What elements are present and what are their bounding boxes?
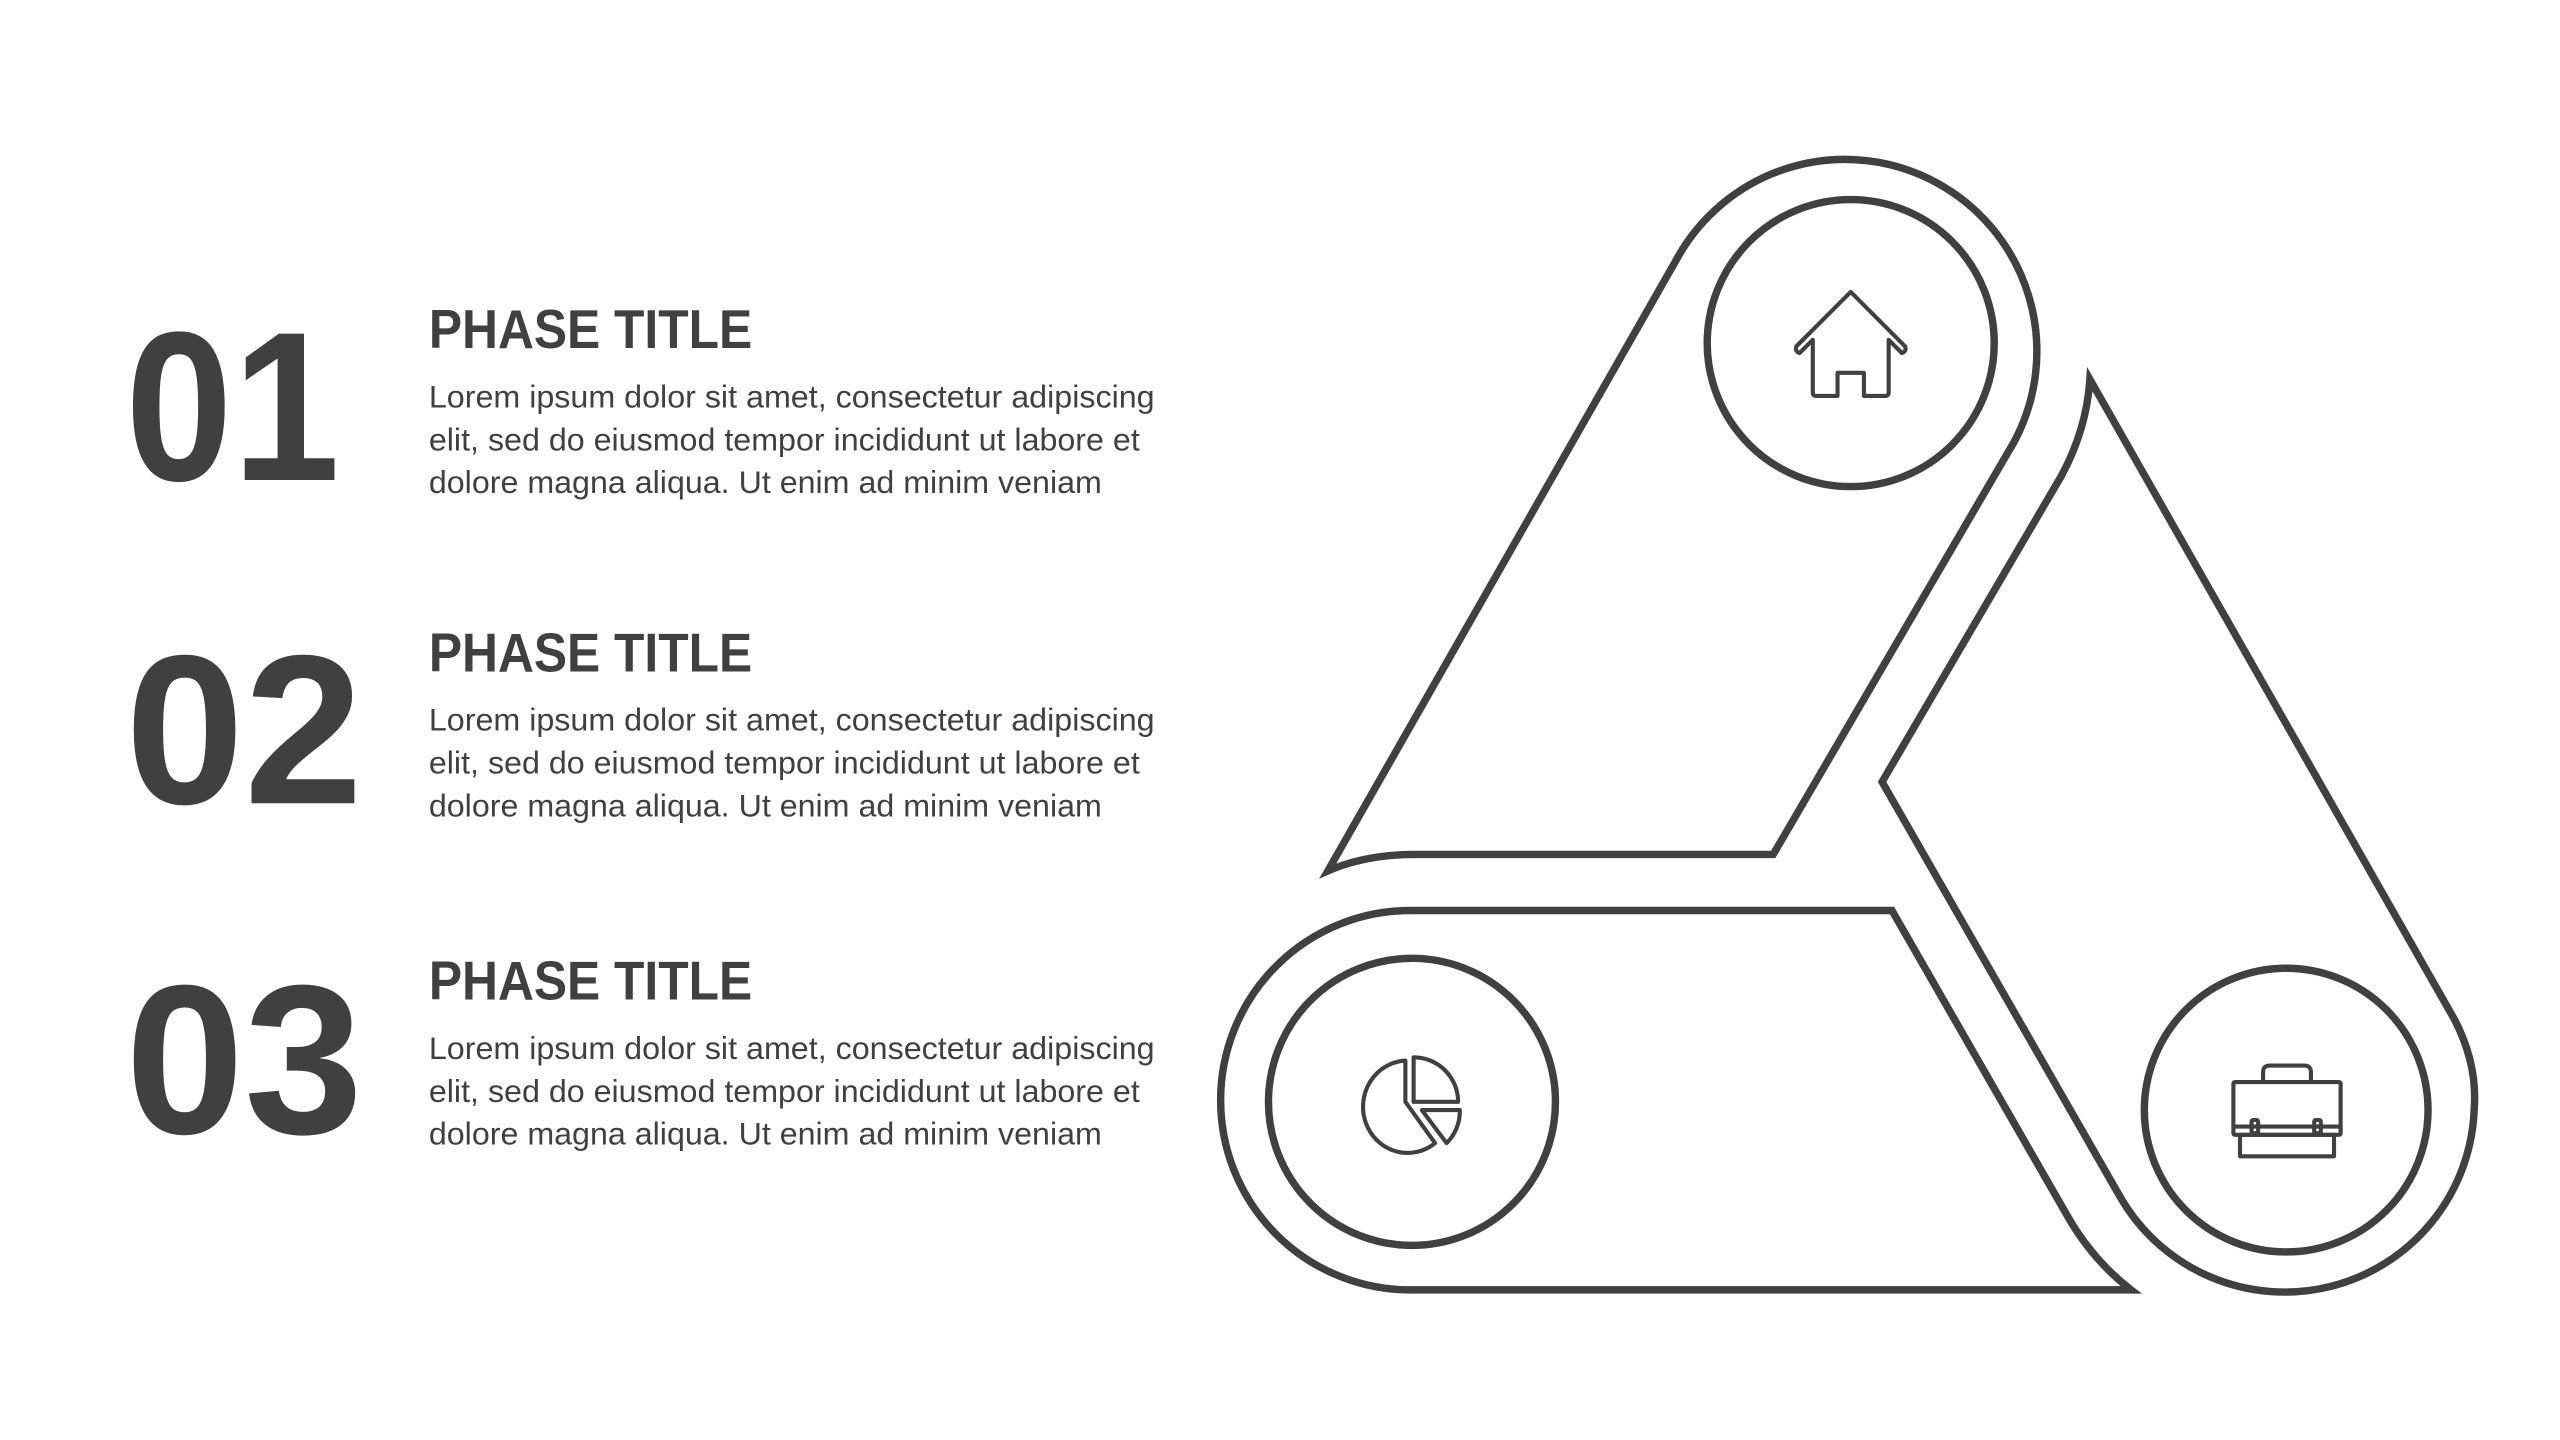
title 01: PHASE TITLE bbox=[429, 299, 752, 360]
body 01: Lorem ipsum dolor sit amet, consectetur adipiscing bbox=[429, 379, 1155, 414]
segment: bottom left bbox=[1221, 911, 2131, 1290]
body 03: elit, sed do eiusmod tempor incididunt ut labore et bbox=[429, 1074, 1140, 1109]
number 01: 01 bbox=[125, 288, 340, 526]
segment: right bbox=[1882, 379, 2475, 1292]
phase 01 block bbox=[125, 288, 1155, 526]
body 02: elit, sed do eiusmod tempor incididunt ut labore et bbox=[429, 746, 1140, 781]
icon: pie chart bbox=[1363, 1057, 1460, 1153]
number 03: 03 bbox=[125, 941, 363, 1179]
body 03: Lorem ipsum dolor sit amet, consectetur adipiscing bbox=[429, 1031, 1155, 1066]
body 01: elit, sed do eiusmod tempor incididunt ut labore et bbox=[429, 422, 1140, 457]
segment: top bbox=[1328, 159, 2037, 871]
icon: house bbox=[1796, 292, 1906, 396]
body 02: Lorem ipsum dolor sit amet, consectetur adipiscing bbox=[429, 703, 1155, 738]
body 02: dolore magna aliqua. Ut enim ad minim veniam bbox=[429, 788, 1102, 823]
phase 03 block bbox=[125, 941, 1155, 1179]
body 03: dolore magna aliqua. Ut enim ad minim veniam bbox=[429, 1117, 1102, 1152]
title 02: PHASE TITLE bbox=[429, 622, 752, 683]
title 03: PHASE TITLE bbox=[429, 951, 752, 1012]
phase 02 block bbox=[125, 611, 1155, 849]
triangle cycle diagram bbox=[1221, 159, 2475, 1292]
body 01: dolore magna aliqua. Ut enim ad minim veniam bbox=[429, 465, 1102, 500]
icon: briefcase bbox=[2233, 1066, 2341, 1156]
number 02: 02 bbox=[125, 611, 363, 849]
